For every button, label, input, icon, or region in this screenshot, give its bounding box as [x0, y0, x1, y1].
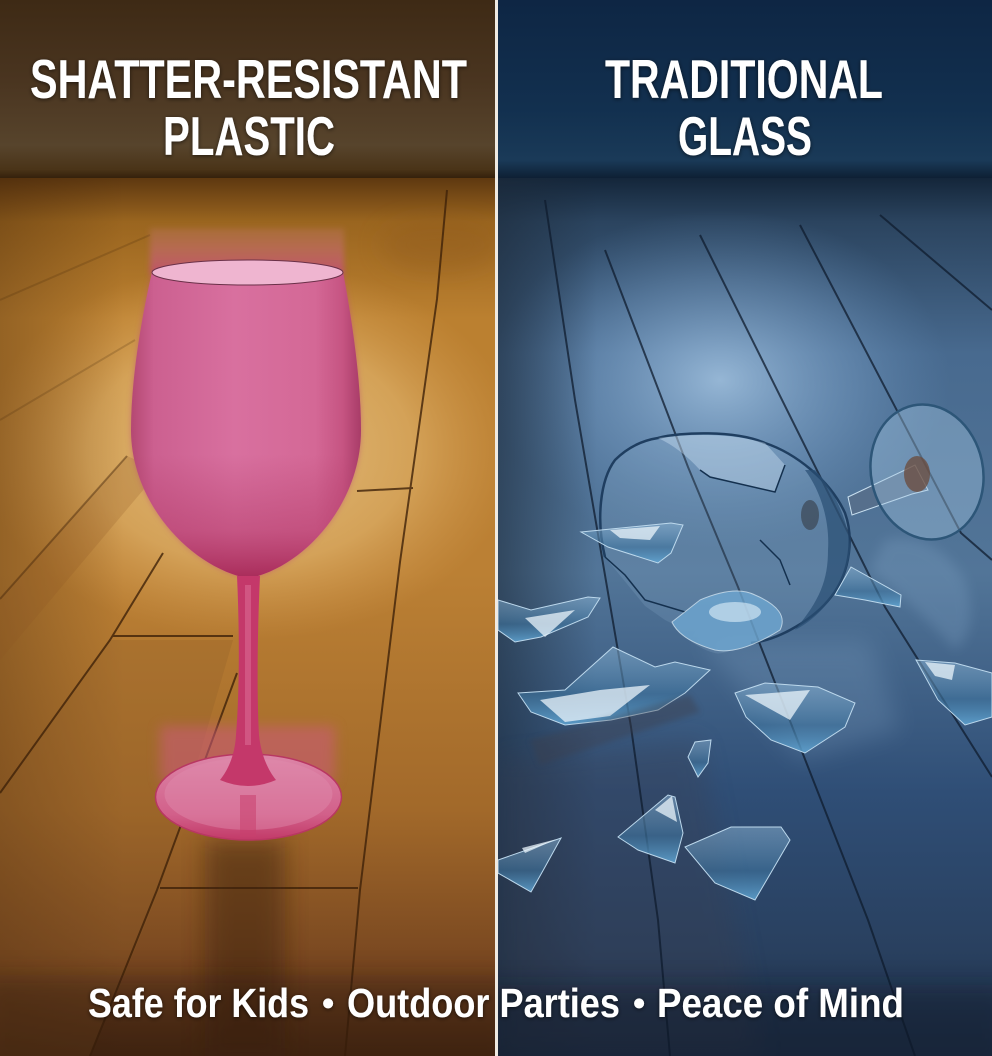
tagline: •: [322, 984, 334, 1023]
shard highlights: [522, 526, 955, 853]
heading: shatter-resistant plastic: [30, 59, 468, 158]
heading: traditional glass: [604, 59, 884, 158]
left wall: [0, 0, 495, 182]
right wall: [498, 0, 992, 182]
glass shards: [498, 523, 992, 900]
tagline: Safe for Kids: [88, 980, 309, 1026]
heading: traditional glass: GLASS: [678, 105, 812, 167]
tagline: Peace of Mind: [657, 980, 904, 1026]
panel: shatter-resistant plastic: [0, 0, 515, 1056]
heading: traditional glass: TRADITIONAL: [605, 48, 883, 110]
glass stem: [848, 465, 928, 515]
foot shadow: [876, 540, 970, 644]
icon: pink plastic wine glass: [131, 228, 361, 840]
icon: broken wine glass: [498, 394, 992, 900]
right wood floor: [480, 178, 992, 1056]
heading: shatter-resistant plastic: PLASTIC: [163, 105, 335, 167]
tagline: Outdoor Parties: [347, 980, 620, 1026]
glass foot: [869, 403, 985, 541]
tagline: [88, 980, 904, 1026]
heading: shatter-resistant plastic: SHATTER-RESISTANT: [30, 48, 467, 110]
tagline: •: [633, 984, 645, 1023]
panel: traditional glass: [480, 0, 992, 1056]
divider: [495, 0, 498, 1056]
glass bowl: [600, 433, 850, 653]
left wood floor: [0, 178, 515, 1056]
